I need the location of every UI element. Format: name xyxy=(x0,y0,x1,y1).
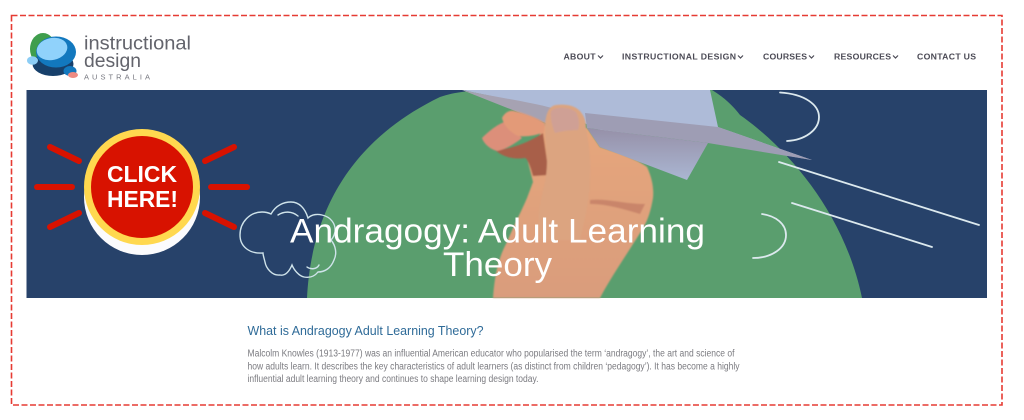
plane top wing xyxy=(462,90,812,160)
thumb xyxy=(539,105,590,240)
dark finger shadow xyxy=(495,133,549,176)
body paragraph: influential adult learning theory and continues to shape learning design today. xyxy=(248,374,538,385)
navigation menu: RESOURCES xyxy=(834,52,891,62)
curved motion arcs and speed lines xyxy=(753,92,979,258)
logo wordmark xyxy=(84,32,191,82)
body paragraph: how adults learn. It describes the key characteristics of adult learners (as distinct from children ‘pedagogy’). It has become a highly xyxy=(248,362,740,372)
plane under wing xyxy=(462,90,552,124)
logo xyxy=(27,32,191,82)
palm highlight and crease xyxy=(590,200,645,214)
banner title: Andragogy: Adult Learning xyxy=(290,212,705,250)
logo wordmark: design xyxy=(84,50,141,72)
thumbnail xyxy=(551,108,579,133)
icon: cloud outline xyxy=(240,202,336,277)
paper plane xyxy=(462,90,812,160)
button label: CLICK xyxy=(107,161,177,187)
button label xyxy=(107,161,178,212)
navigation menu: CONTACT US xyxy=(917,52,976,62)
banner background xyxy=(26,90,987,298)
body paragraph xyxy=(248,348,740,385)
hand xyxy=(482,105,653,298)
plane front fold xyxy=(587,128,708,180)
upper finger xyxy=(502,111,545,136)
plane wing crease xyxy=(585,113,812,160)
banner title: Theory xyxy=(443,246,552,284)
button base xyxy=(84,139,200,255)
navigation menu xyxy=(564,52,976,62)
button label: HERE! xyxy=(107,186,178,212)
navigation menu: INSTRUCTIONAL DESIGN xyxy=(622,52,736,62)
body paragraph: Malcolm Knowles (1913-1977) was an influential American educator who popularised the term ‘andragogy’, the art and science of xyxy=(248,348,735,360)
logo wordmark: instructional xyxy=(84,32,191,54)
button face xyxy=(91,136,193,238)
icon: logo mark xyxy=(27,33,78,78)
banner title xyxy=(290,212,705,284)
button ring xyxy=(84,129,200,245)
green circle xyxy=(307,90,862,298)
lower finger xyxy=(482,122,522,151)
navigation menu: ABOUT xyxy=(564,52,596,62)
section heading: What is Andragogy Adult Learning Theory? xyxy=(248,323,484,338)
click here button xyxy=(37,129,247,255)
navigation menu: COURSES xyxy=(763,52,807,62)
logo wordmark: AUSTRALIA xyxy=(84,72,150,82)
red rays xyxy=(37,147,247,227)
hero banner xyxy=(26,90,987,298)
palm and wrist xyxy=(493,125,653,298)
